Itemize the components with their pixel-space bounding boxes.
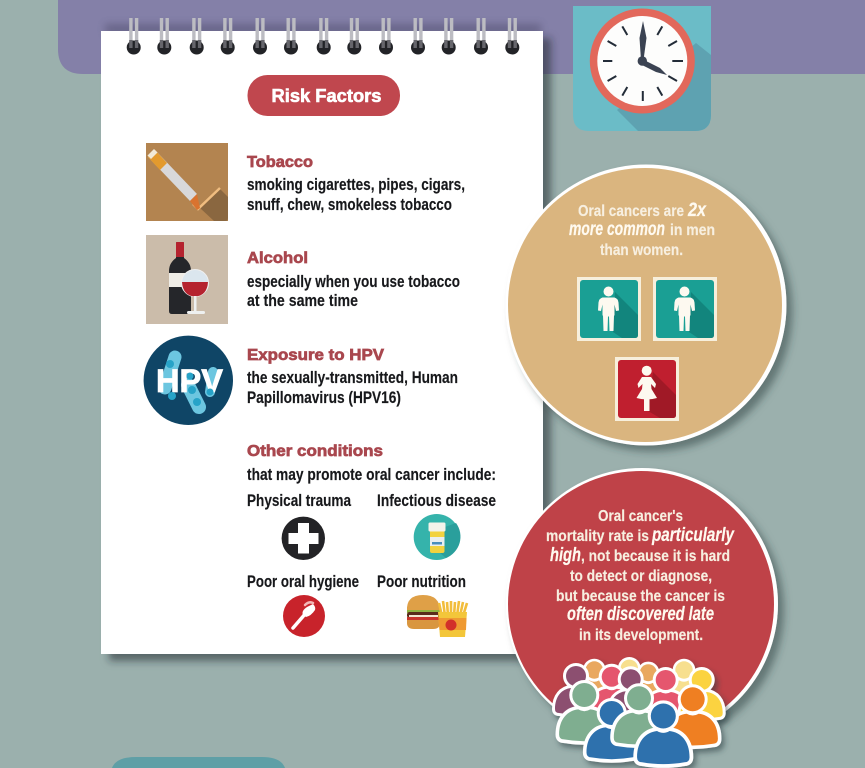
panel: mortality statistic [506, 468, 778, 764]
text: Alcohol: Alcohol [247, 250, 308, 267]
item: infectious disease [377, 491, 496, 560]
icon: HPV virus [144, 336, 233, 425]
text: mortality: particularly [651, 525, 735, 546]
text: Tobacco [247, 154, 465, 214]
icon: man 2 [653, 277, 717, 341]
text: statistic [569, 200, 715, 259]
purple header band [58, 0, 865, 74]
text: Tobacco: snuff, chew, smokeless tobacco [247, 195, 452, 214]
text: statistic: Oral cancers are [578, 203, 684, 220]
text: mortality: often discovered late [567, 604, 714, 625]
text: mortality: Oral cancer's [598, 508, 683, 525]
text: mortality: to detect or diagnose, [570, 568, 712, 585]
panel: notebook page [101, 18, 543, 654]
bottom teal tab [112, 757, 285, 768]
text: Alcohol: at the same time [247, 291, 358, 310]
text: Exposure to HPV: the sexually-transmitted, Human [247, 368, 458, 387]
text: mortality: mortality rate is [546, 528, 649, 545]
icon: man 1 [577, 277, 641, 341]
icon: wine bottle and glass [146, 235, 228, 324]
text: mortality: , not because it is hard [581, 548, 730, 565]
heading: Risk Factors: Risk Factors [272, 86, 382, 106]
notebook spiral binding [127, 18, 519, 54]
text: Exposure to HPV: Papillomavirus (HPV16) [247, 388, 401, 407]
clock icon [573, 6, 711, 131]
text: Alcohol: especially when you use tobacco [247, 272, 460, 291]
text: Tobacco: smoking cigarettes, pipes, cigars, [247, 175, 465, 194]
text: mortality: in its development. [579, 627, 703, 644]
icon: HPV virus: HPV [156, 363, 224, 399]
text: Other conditions: that may promote oral cancer include: [247, 465, 496, 484]
item: physical trauma: Physical trauma [247, 491, 351, 510]
item: infectious disease: Infectious disease [377, 491, 496, 510]
text: Tobacco: Tobacco [247, 154, 313, 171]
text: statistic: more common [569, 219, 665, 240]
text: Exposure to HPV: Exposure to HPV [247, 347, 384, 364]
text: statistic: 2x [687, 200, 707, 221]
icon: cigarette [146, 143, 228, 221]
item: physical trauma [247, 491, 351, 560]
text: mortality: high [550, 545, 581, 566]
icon: crowd of people [555, 660, 723, 764]
panel: men vs women statistic [506, 164, 786, 446]
heading: Risk Factors [248, 75, 400, 116]
item: poor nutrition: Poor nutrition [377, 572, 466, 591]
text: mortality [546, 508, 735, 644]
text: Alcohol [247, 250, 460, 310]
text: Other conditions: Other conditions [247, 443, 383, 460]
item: poor oral hygiene [247, 572, 359, 637]
item: poor oral hygiene: Poor oral hygiene [247, 572, 359, 591]
icon: woman [615, 357, 679, 421]
text: Other conditions [247, 443, 496, 484]
text: statistic: than women. [600, 242, 683, 259]
item: poor nutrition [377, 572, 467, 637]
text: Exposure to HPV [247, 347, 458, 407]
text: statistic: in men [670, 222, 715, 239]
text: mortality: but because the cancer is [556, 588, 725, 605]
